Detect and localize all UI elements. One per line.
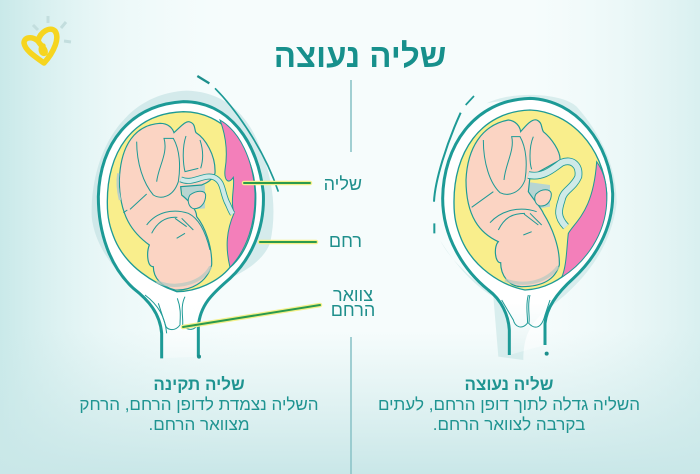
label: cervix: צוואר [333, 285, 373, 305]
umbilical cord [528, 161, 579, 227]
halo [92, 91, 273, 300]
grey shading by hand [180, 183, 205, 210]
title: שליה נעוצה [274, 37, 446, 74]
placenta pink [562, 162, 607, 277]
caption: normal placenta [79, 375, 319, 434]
baby details [123, 136, 210, 250]
label: uterus: רחם [329, 231, 362, 251]
logo: yellow heart with rays [21, 16, 72, 66]
label: cervix [331, 285, 375, 320]
caption: normal placenta: שליה תקינה [153, 375, 245, 394]
hand [188, 191, 206, 209]
caption: placenta accreta: השליה גדלה לתוך דופן הרחם, לעתים [378, 395, 640, 414]
sac yellow [107, 112, 256, 292]
uterus wall [443, 98, 613, 355]
diagram: placenta previa style [433, 95, 616, 360]
sac yellow [454, 110, 607, 290]
label: placenta: שליה [324, 174, 362, 194]
baby [466, 120, 560, 287]
caption: placenta accreta: שליה נעוצה [465, 375, 553, 394]
cervix [158, 297, 200, 330]
uterus wall [98, 102, 263, 358]
center divider [350, 80, 352, 474]
label: cervix: הרחם [331, 300, 375, 320]
baby details [472, 137, 542, 235]
pelvis strokes [466, 96, 474, 105]
caption: placenta accreta [378, 375, 640, 434]
caption: placenta accreta: בקרבה לצוואר הרחם. [433, 415, 585, 434]
placenta pink [220, 120, 255, 267]
hand [535, 190, 551, 206]
halo [440, 95, 617, 360]
upper pelvis strokes [197, 76, 209, 83]
caption: normal placenta: מצוואר הרחם. [148, 415, 250, 434]
grey shading by hand [525, 182, 550, 210]
diagram: normal placenta [92, 75, 280, 359]
cervix [502, 295, 550, 327]
umbilical cord [181, 176, 233, 214]
caption: normal placenta: השליה נצמדת לדופן הרחם, הרחק [79, 395, 319, 414]
baby [119, 122, 215, 290]
